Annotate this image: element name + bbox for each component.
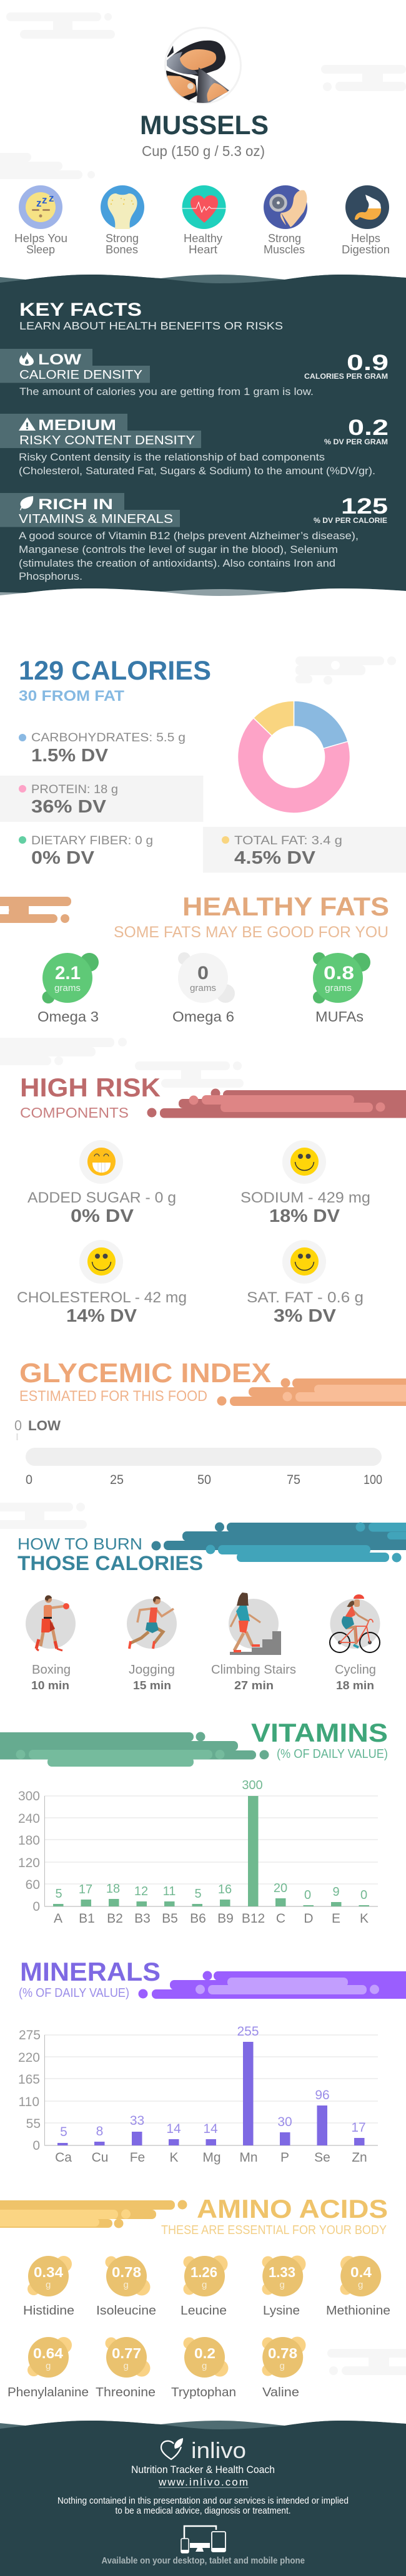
component: saturated fat	[247, 1240, 364, 1326]
amino: phenylalanine: 0.64	[33, 2345, 63, 2361]
amino: lysine: g	[280, 2280, 285, 2290]
component: cholesterol: 14% DV	[66, 1306, 137, 1326]
unit: % DV PER GRAM	[324, 439, 388, 446]
text: medium description: (Cholesterol, Saturated Fat, Sugars & Sodium) to the amount (%DV/gr).	[19, 466, 375, 477]
bubble: mufas: grams	[325, 983, 352, 993]
decorative cloud	[327, 2349, 406, 2375]
bar chart: minerals: 255	[237, 2024, 259, 2039]
legend: carbohydrates	[19, 731, 186, 766]
bar chart: minerals: 14	[203, 2122, 218, 2136]
bubble: mufas	[313, 952, 370, 1025]
heading: key facts: KEY FACTS	[19, 300, 142, 320]
bubble: omega 6: Omega 6	[172, 1008, 234, 1025]
bar chart: vitamins	[18, 1778, 378, 1926]
amino: tryptophan	[171, 2337, 236, 2399]
bar chart: minerals: 30	[277, 2115, 292, 2129]
activity: jogging	[127, 1596, 177, 1692]
decorative cloud	[0, 1503, 87, 1529]
donut chart	[238, 701, 350, 813]
bar chart: minerals: 14	[166, 2122, 181, 2136]
decoration	[0, 897, 71, 923]
amino: leucine	[181, 2255, 227, 2318]
bar chart: minerals: 165	[18, 2072, 40, 2087]
gauge axis: 50	[197, 1473, 211, 1487]
bar chart: minerals: 5	[60, 2125, 67, 2139]
amino: isoleucine: Isoleucine	[96, 2303, 156, 2318]
bubble: mufas: 0.8	[324, 963, 354, 983]
icon: digestion	[345, 185, 389, 229]
label: Sleep	[26, 243, 55, 256]
website: www.inlivo.com	[158, 2476, 248, 2488]
amino: leucine: Leucine	[181, 2303, 227, 2318]
amino: tryptophan: Tryptophan	[171, 2385, 236, 2399]
panel: high risk	[17, 1073, 406, 1326]
tagline: Nutrition Tracker & Health Coach	[131, 2464, 275, 2476]
decoration	[217, 1378, 406, 1406]
bar chart: minerals	[18, 2024, 378, 2165]
legend: carbohydrates: CARBOHYDRATES: 5.5 g	[31, 731, 186, 744]
subheading: (% OF DAILY VALUE)	[277, 1747, 388, 1761]
gauge axis: 25	[110, 1473, 124, 1487]
heading: HIGH RISK	[20, 1073, 161, 1102]
marker: 0	[14, 1417, 22, 1433]
legend: dietary fiber: DIETARY FIBER: 0 g	[31, 834, 153, 847]
bar chart: vitamins: 20	[274, 1881, 287, 1895]
amino: histidine: 0.34	[34, 2264, 63, 2280]
amino: tryptophan: 0.2	[194, 2345, 215, 2361]
bar chart: vitamins: 9	[332, 1885, 340, 1899]
gauge axis: 100	[364, 1473, 382, 1487]
unit: CALORIES PER GRAM	[304, 373, 388, 381]
panel: burn calories	[17, 1523, 406, 1692]
text: medium description	[19, 452, 375, 477]
icon: sleep: z	[36, 197, 41, 209]
bar chart: vitamins: B9	[217, 1911, 234, 1926]
legend: protein: 36% DV	[31, 797, 107, 817]
bar chart: vitamins: 120	[18, 1856, 40, 1870]
subheading: 30 FROM FAT	[19, 688, 124, 705]
icon: flame	[19, 351, 34, 366]
icon: sleep	[19, 185, 62, 229]
gauge axis	[26, 1473, 382, 1487]
legend: protein: PROTEIN: 18 g	[31, 783, 118, 796]
bar chart: minerals: 55	[26, 2117, 41, 2131]
component: sodium	[240, 1140, 370, 1226]
activity: cycling: 18 min	[336, 1679, 374, 1692]
disclaimer: Nothing contained in this presentation and our services is intended or implied	[57, 2496, 349, 2506]
bar chart: minerals: 220	[18, 2051, 40, 2065]
bar chart: vitamins: 240	[18, 1812, 40, 1826]
subheading: COMPONENTS	[20, 1105, 129, 1121]
icon: inlivo logo	[161, 2438, 183, 2459]
amino: lysine	[262, 2255, 306, 2318]
bar chart: vitamins: D	[304, 1911, 314, 1926]
bar chart: vitamins: 0	[360, 1888, 367, 1902]
amino: lysine: 1.33	[269, 2264, 295, 2280]
benefits row	[14, 185, 390, 256]
amino: histidine	[23, 2256, 74, 2318]
subheading: LEARN ABOUT HEALTH BENEFITS OR RISKS	[19, 320, 283, 332]
label: Strong	[268, 232, 301, 245]
disclaimer	[57, 2496, 349, 2516]
subheading: ESTIMATED FOR THIS FOOD	[19, 1388, 207, 1405]
amino: methionine: 0.4	[350, 2264, 372, 2280]
label: Muscles	[264, 243, 305, 256]
gauge axis: 75	[287, 1473, 300, 1487]
bar chart: minerals: 17	[351, 2120, 366, 2135]
component: saturated fat: 3% DV	[274, 1306, 337, 1326]
decoration	[151, 1523, 406, 1563]
bar chart: minerals: Se	[314, 2150, 330, 2165]
bar chart: vitamins: C	[276, 1911, 285, 1926]
value: 125: 125	[341, 494, 388, 519]
icon: sleep: z	[42, 194, 47, 206]
bubble: omega 3: Omega 3	[37, 1008, 99, 1025]
bar chart: minerals: 0	[32, 2139, 40, 2153]
panel: vitamins	[0, 1718, 388, 1926]
amino: threonine: g	[124, 2361, 129, 2371]
label: Strong	[106, 232, 139, 245]
bar chart: vitamins: 5	[194, 1887, 202, 1901]
panel: calories	[0, 656, 406, 872]
heading: VITAMINS	[251, 1718, 388, 1747]
footer	[0, 2421, 406, 2576]
availability note: Available on your desktop, tablet and mobile phone	[101, 2555, 305, 2566]
label: Bones	[106, 243, 138, 256]
bar chart: vitamins: 5	[55, 1887, 62, 1901]
bar chart: vitamins: 18	[106, 1882, 120, 1896]
amino: methionine	[326, 2256, 390, 2318]
rich in vitamins and minerals	[0, 493, 180, 527]
amino: histidine: Histidine	[23, 2303, 74, 2318]
legend: dietary fiber: 0% DV	[31, 848, 95, 868]
bar chart: vitamins: B5	[162, 1911, 178, 1926]
heading: MINERALS	[20, 1957, 161, 1986]
subheading: SOME FATS MAY BE GOOD FOR YOU	[114, 924, 389, 941]
legend: carbohydrates: 1.5% DV	[31, 746, 109, 766]
text: low description: The amount of calories you are getting from 1 gram is low.	[19, 386, 314, 398]
amino: tryptophan: g	[202, 2361, 207, 2371]
amino: threonine	[96, 2337, 156, 2399]
bar chart: minerals: Mn	[239, 2150, 258, 2165]
component: cholesterol	[17, 1240, 187, 1326]
amino: threonine: Threonine	[96, 2385, 156, 2399]
label: Healthy	[184, 232, 222, 245]
low calorie density	[0, 349, 150, 383]
component: sodium: SODIUM - 429 mg	[240, 1189, 370, 1206]
component: added sugar: ADDED SUGAR - 0 g	[27, 1189, 176, 1206]
bar chart: minerals: Mg	[202, 2150, 221, 2165]
bubble: mufas: MUFAs	[315, 1008, 364, 1025]
medium risky content density: RISKY CONTENT DENSITY	[19, 434, 195, 447]
bar chart: minerals: 33	[130, 2114, 144, 2128]
gauge axis: 0	[26, 1473, 32, 1487]
icon: leaf	[20, 496, 33, 510]
icon: devices	[181, 2526, 225, 2553]
bar chart: vitamins: B2	[107, 1911, 123, 1926]
unit: % DV PER CALORIE	[314, 517, 387, 525]
bar chart: vitamins: K	[360, 1911, 369, 1926]
icon: muscles	[264, 185, 307, 229]
heading: calories: 129 CALORIES	[19, 656, 211, 686]
decoration	[139, 1971, 406, 1999]
panel: amino acids	[0, 2194, 390, 2399]
heading: AMINO ACIDS	[197, 2194, 388, 2223]
legend: total fat	[222, 834, 342, 868]
medium risky content density	[0, 414, 201, 448]
amino: methionine: Methionine	[326, 2303, 390, 2318]
icon: sleep: z	[49, 192, 54, 204]
bubble: omega 3: grams	[54, 983, 81, 993]
amino: threonine: 0.77	[112, 2345, 141, 2361]
bar chart: minerals: K	[169, 2150, 179, 2165]
bubble: omega 6: grams	[190, 983, 216, 993]
bar chart: vitamins: 11	[163, 1885, 176, 1898]
bar chart: minerals: P	[280, 2150, 289, 2165]
food photo: mussels	[165, 27, 241, 104]
bar chart: minerals: 110	[19, 2095, 39, 2109]
serving size: Cup (150 g / 5.3 oz)	[142, 143, 265, 159]
gauge bar	[26, 1448, 382, 1466]
decoration	[0, 1732, 269, 1767]
bar chart: vitamins: B6	[190, 1911, 206, 1926]
title: MUSSELS	[140, 110, 269, 140]
component: saturated fat: SAT. FAT - 0.6 g	[247, 1289, 364, 1306]
icon: bones	[101, 185, 144, 229]
heading: THOSE CALORIES	[17, 1552, 203, 1574]
subheading: THESE ARE ESSENTIAL FOR YOUR BODY	[161, 2223, 387, 2237]
decoration	[147, 1088, 406, 1118]
decorative clouds: top	[0, 12, 406, 179]
activity: boxing	[26, 1595, 76, 1692]
legend: total fat: TOTAL FAT: 3.4 g	[234, 834, 342, 847]
amino: histidine: g	[46, 2280, 51, 2290]
text: rich description: (stimulates the creation of antioxidants). Also contains Iron and	[19, 558, 335, 569]
label: Helps You	[14, 232, 67, 245]
bar chart: minerals: 96	[315, 2088, 330, 2102]
component: added sugar	[27, 1140, 176, 1226]
label: Helps	[351, 232, 380, 245]
bar chart: vitamins: 12	[134, 1885, 148, 1898]
bar chart: vitamins: E	[332, 1911, 340, 1926]
legend: protein	[19, 783, 118, 817]
amino: isoleucine: g	[124, 2280, 129, 2290]
bubble: omega 3: 2.1	[55, 963, 81, 983]
panel: healthy fats	[0, 892, 389, 1025]
activity: climbing stairs: 27 min	[234, 1679, 274, 1692]
text: rich description	[19, 530, 359, 582]
bar chart: vitamins: 0	[32, 1900, 40, 1914]
panel: glycemic index	[14, 1358, 406, 1487]
bar chart: minerals: Zn	[352, 2150, 367, 2165]
bar chart: vitamins: B12	[242, 1911, 265, 1926]
text: medium description: Risky Content density is the relationship of bad components	[19, 452, 325, 463]
bar chart: vitamins: A	[54, 1911, 62, 1926]
bar chart: minerals: Ca	[55, 2150, 72, 2165]
amino: leucine: g	[202, 2280, 207, 2290]
bar chart: vitamins: 60	[26, 1878, 40, 1892]
panel: key facts	[0, 275, 406, 602]
panel: minerals	[18, 1957, 406, 2165]
activity: jogging: 15 min	[133, 1679, 171, 1692]
icon: warning	[19, 417, 36, 431]
heading: HOW TO BURN	[17, 1536, 142, 1553]
heading: HEALTHY FATS	[182, 892, 389, 921]
bar chart: minerals: 8	[96, 2124, 103, 2139]
amino: leucine: 1.26	[191, 2264, 217, 2280]
low calorie density: CALORIE DENSITY	[19, 368, 142, 382]
activity: cycling	[330, 1594, 380, 1692]
component: cholesterol: CHOLESTEROL - 42 mg	[17, 1289, 187, 1306]
decoration	[0, 2200, 187, 2228]
icon: heart	[182, 185, 226, 229]
bar chart: vitamins: 300	[18, 1789, 40, 1803]
marker	[14, 1417, 61, 1440]
wordmark: inlivo	[191, 2437, 246, 2463]
bar chart: vitamins: B1	[79, 1911, 95, 1926]
amino: phenylalanine: g	[46, 2361, 51, 2371]
disclaimer: to be a medical advice, diagnosis or treatment.	[115, 2506, 291, 2516]
bar chart: minerals: 275	[19, 2028, 41, 2042]
bar chart: minerals: Fe	[130, 2150, 145, 2165]
label: Heart	[189, 243, 217, 256]
decorative clouds	[0, 1038, 244, 1088]
low calorie density: LOW	[38, 351, 81, 368]
bar chart: vitamins: B3	[134, 1911, 151, 1926]
amino: valine: 0.78	[268, 2345, 297, 2361]
decorative cloud	[295, 656, 396, 685]
value: 0.9: 0.9	[347, 351, 389, 375]
activity: climbing stairs	[211, 1593, 296, 1692]
bar chart: vitamins: 17	[79, 1883, 92, 1896]
activity: boxing: 10 min	[31, 1679, 69, 1692]
amino: valine	[262, 2336, 306, 2399]
rich in vitamins and minerals: VITAMINS & MINERALS	[19, 512, 173, 526]
text: rich description: Manganese (controls the level of sugar in the blood), Selenium	[19, 544, 338, 555]
bar chart: vitamins: 0	[304, 1888, 311, 1902]
amino: valine: g	[280, 2361, 285, 2371]
amino: isoleucine	[96, 2256, 156, 2318]
amino: valine: Valine	[262, 2385, 299, 2399]
amino: lysine: Lysine	[263, 2303, 300, 2318]
marker: LOW	[28, 1418, 61, 1433]
amino: methionine: g	[358, 2280, 363, 2290]
amino: phenylalanine: Phenylalanine	[7, 2385, 89, 2399]
component: added sugar: 0% DV	[71, 1206, 134, 1226]
legend: dietary fiber	[19, 834, 153, 868]
activity: boxing: Boxing	[32, 1663, 71, 1677]
value: 0.2: 0.2	[348, 416, 389, 440]
legend: total fat: 4.5% DV	[234, 848, 316, 868]
bar chart: vitamins: 16	[218, 1883, 232, 1896]
amino: phenylalanine	[7, 2337, 89, 2399]
medium risky content density: MEDIUM	[38, 417, 116, 434]
bubble: omega 6	[172, 952, 235, 1025]
activity: jogging: Jogging	[129, 1663, 175, 1677]
activity: climbing stairs: Climbing Stairs	[211, 1663, 296, 1677]
component: sodium: 18% DV	[269, 1206, 340, 1226]
heading: GLYCEMIC INDEX	[19, 1358, 271, 1388]
text: rich description: Phosphorus.	[19, 571, 82, 582]
bar chart: minerals: Cu	[92, 2150, 108, 2165]
bubble: omega 3	[37, 953, 99, 1025]
row backgrounds	[0, 776, 406, 872]
label: Digestion	[342, 243, 390, 256]
bar chart: vitamins: 300	[242, 1778, 263, 1792]
rich in vitamins and minerals: RICH IN	[38, 496, 113, 513]
subheading: (% OF DAILY VALUE)	[19, 1986, 129, 2000]
bubble: omega 6: 0	[197, 963, 209, 983]
bar chart: vitamins: 180	[18, 1833, 40, 1848]
amino: isoleucine: 0.78	[112, 2264, 141, 2280]
activity: cycling: Cycling	[335, 1663, 376, 1677]
text: rich description: A good source of Vitamin B12 (helps prevent Alzheimer’s disease),	[19, 530, 359, 542]
